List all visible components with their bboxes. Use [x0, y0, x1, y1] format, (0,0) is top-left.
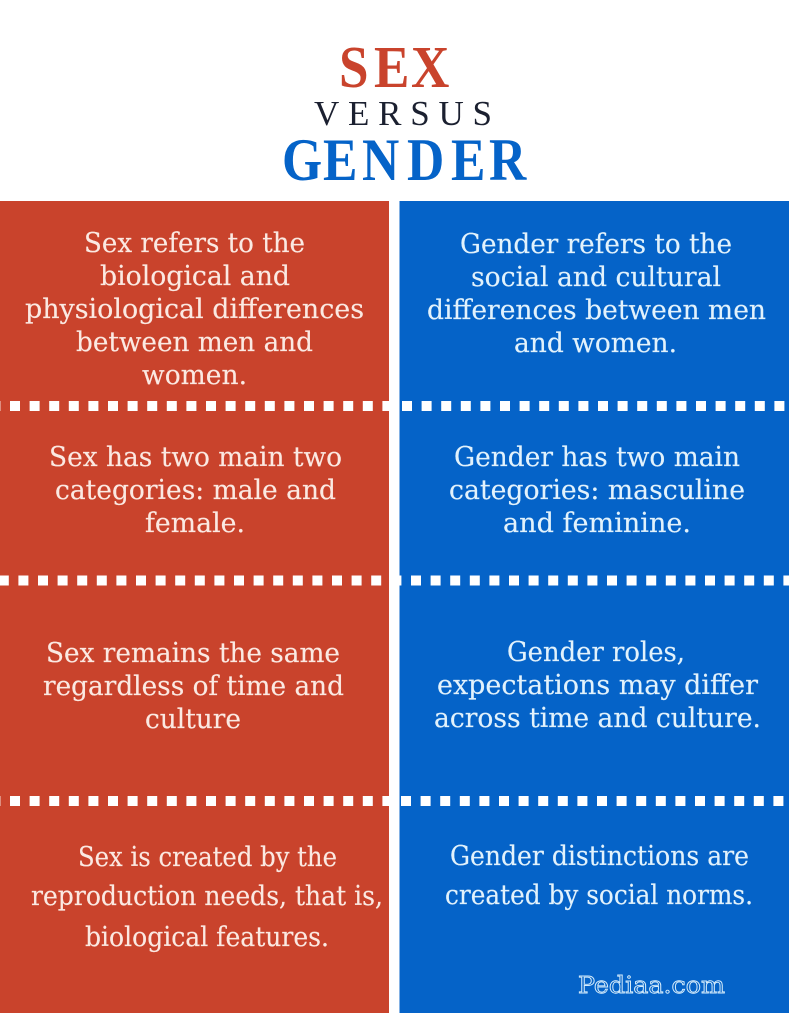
text block: gender variation: Gender roles, [507, 637, 685, 668]
text block: gender categories [449, 442, 745, 539]
text block: sex definition: between men and [76, 327, 313, 358]
text block: sex categories [49, 442, 342, 539]
text block: gender variation: expectations may differ [437, 670, 758, 701]
text block: gender variation: across time and culture. [434, 703, 761, 734]
text block: sex definition: women. [142, 360, 247, 391]
dotted divider 1 [0, 401, 789, 411]
text block: sex constancy: culture [145, 704, 241, 735]
dotted divider 2 [0, 576, 789, 586]
text block: gender definition: differences between men [427, 295, 766, 326]
text block: sex definition: biological and [100, 261, 290, 292]
dotted divider 3 [0, 796, 789, 806]
text block: gender origin [445, 841, 753, 911]
text block: gender origin: Gender distinctions are [450, 841, 749, 872]
text block: sex constancy: Sex remains the same [46, 638, 340, 669]
text block: gender definition [427, 229, 766, 359]
text block: sex origin [31, 842, 383, 953]
text block: sex origin: biological features. [85, 922, 329, 953]
text block: gender definition: Gender refers to the [460, 229, 732, 260]
panel: gender column [400, 201, 789, 1013]
text block: sex definition: physiological differences [25, 294, 364, 325]
text block: sex categories: Sex has two main two [49, 442, 342, 473]
text block: sex origin: Sex is created by the [78, 842, 337, 873]
text block: sex constancy [43, 638, 344, 735]
logo: Pediaa.com: Pediaa.com [578, 973, 725, 999]
text block: sex categories: female. [145, 508, 245, 539]
text block: sex definition: Sex refers to the [84, 228, 305, 259]
text block: gender categories: Gender has two main [454, 442, 740, 473]
text block: gender categories: and feminine. [503, 508, 691, 539]
title: sex: SEX [339, 35, 449, 101]
text block: sex categories: categories: male and [55, 475, 336, 506]
panel: sex column [0, 201, 389, 1013]
title [282, 35, 527, 194]
title: gender: GENDER [282, 127, 527, 194]
text block: sex definition [25, 228, 364, 391]
text block: sex constancy: regardless of time and [43, 671, 344, 702]
text block: gender definition: social and cultural [471, 262, 721, 293]
text block: sex origin: reproduction needs, that is, [31, 881, 383, 912]
text block: gender variation [434, 637, 761, 734]
text block: gender origin: created by social norms. [445, 880, 753, 911]
text block: gender definition: and women. [514, 328, 677, 359]
text block: gender categories: categories: masculine [449, 475, 745, 506]
title: versus: VERSUS [314, 94, 492, 133]
